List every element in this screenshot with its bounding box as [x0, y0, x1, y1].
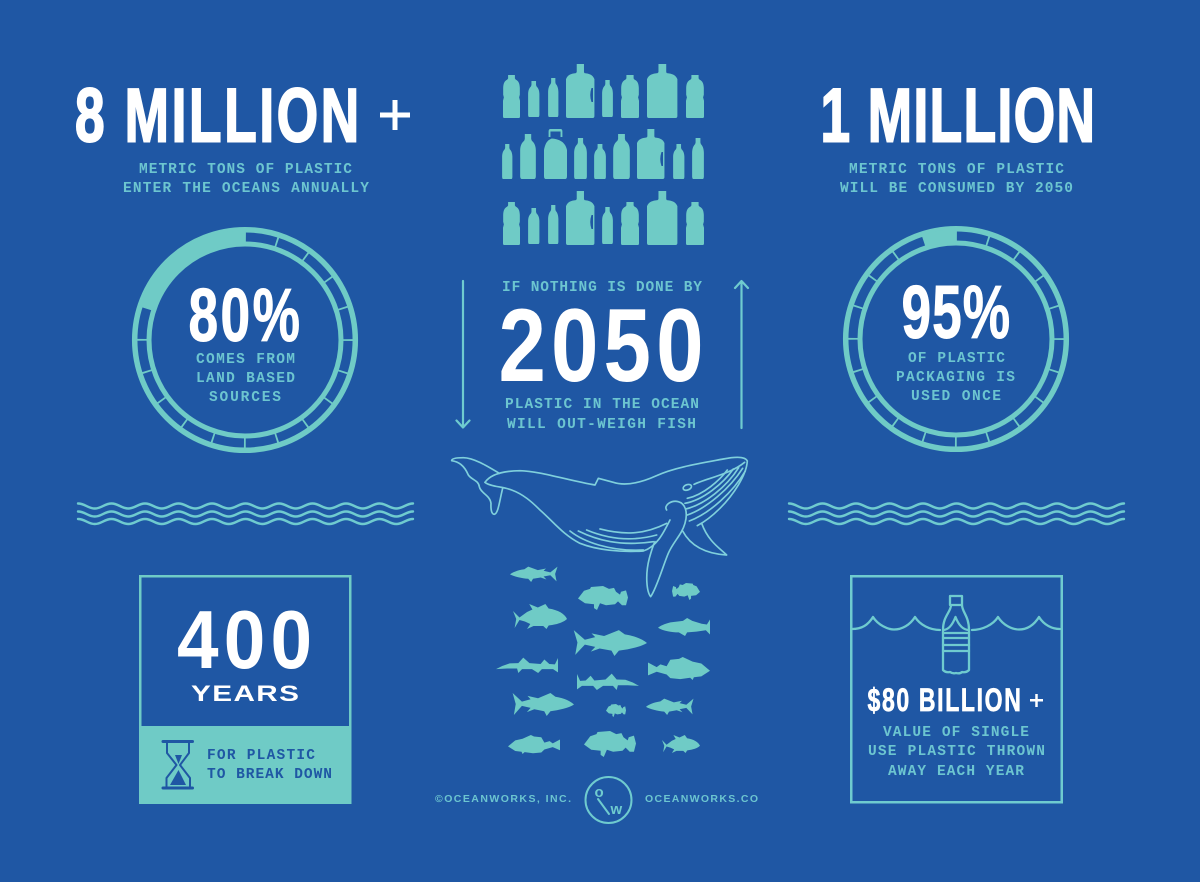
text: value of single use plastic: AWAY EACH YEAR	[888, 764, 1024, 780]
label: years: YEARS	[191, 681, 299, 706]
text: left subheading	[123, 162, 369, 197]
panel: 80 percent ring	[115, 210, 375, 470]
panel: 80 billion	[851, 576, 1062, 802]
teal footer band	[139, 726, 351, 804]
text: packaging used once: PACKAGING IS	[896, 370, 1015, 386]
panel: 2050 center	[498, 280, 704, 433]
box outline	[140, 576, 350, 803]
text: left subheading: METRIC TONS OF PLASTIC	[139, 162, 352, 178]
text: right subheading: METRIC TONS OF PLASTIC	[849, 162, 1064, 178]
text: value of single use plastic: VALUE OF SINGLE	[883, 725, 1029, 741]
text: land based sources: LAND BASED	[196, 371, 295, 387]
ring chart: 80 percent	[115, 210, 375, 470]
logo: oceanworks	[586, 777, 632, 823]
stat: 400: 400	[177, 593, 312, 686]
text: value of single use plastic	[868, 725, 1045, 780]
text: packaging used once: OF PLASTIC	[908, 351, 1005, 367]
footer: website: OCEANWORKS.CO	[645, 793, 758, 805]
stat: 2050: 2050	[498, 288, 703, 404]
text: land based sources: SOURCES	[209, 390, 281, 406]
heading: 1 million: 1 MILLION	[820, 73, 1095, 158]
text: land based sources	[196, 352, 295, 406]
logo: oceanworks: o	[594, 784, 604, 801]
text: packaging used once	[896, 351, 1015, 405]
icon: bottle floating in waves	[852, 596, 1060, 673]
stat: 95%: 95%	[902, 270, 1010, 354]
panel: 95 percent ring	[826, 209, 1086, 469]
text: value of single use plastic: USE PLASTIC THROWN	[868, 744, 1045, 760]
ring chart: 95 percent	[826, 209, 1086, 469]
arrow: up	[735, 281, 748, 428]
heading: 8 million plus: 8 MILLION	[75, 73, 359, 158]
text: packaging used once: USED ONCE	[911, 389, 1001, 405]
text: for plastic to break down: TO BREAK DOWN	[207, 767, 332, 783]
waves: left	[78, 504, 413, 524]
stat: $80 billion plus: $80 BILLION	[868, 682, 1021, 718]
text: for plastic to break down	[207, 748, 332, 783]
icon: rows of plastic bottles	[502, 64, 704, 245]
text: land based sources: COMES FROM	[196, 352, 295, 368]
stat: 80%: 80%	[188, 273, 300, 357]
text: right subheading	[840, 162, 1073, 197]
logo: oceanworks: w	[610, 801, 622, 818]
waves: right	[789, 504, 1124, 524]
text: left subheading: ENTER THE OCEANS ANNUALLY	[123, 181, 369, 197]
text: for plastic to break down: FOR PLASTIC	[207, 748, 315, 764]
icon: hourglass	[163, 742, 192, 788]
footer: copyright: ©OCEANWORKS, INC.	[435, 793, 571, 805]
arrow: down	[456, 281, 470, 428]
illustration: school of fish	[496, 567, 710, 757]
illustration: humpback whale	[452, 457, 747, 597]
box outline	[851, 576, 1062, 802]
text: plastic will out-weigh fish: WILL OUT-WEIGH FISH	[507, 417, 696, 433]
text: right subheading: WILL BE CONSUMED BY 2050	[840, 181, 1073, 197]
text: plastic will out-weigh fish: PLASTIC IN THE OCEAN	[505, 397, 699, 413]
text: plastic will out-weigh fish	[505, 397, 699, 433]
text: if nothing is done by: IF NOTHING IS DONE BY	[502, 280, 702, 296]
panel: 400 years	[139, 576, 351, 804]
